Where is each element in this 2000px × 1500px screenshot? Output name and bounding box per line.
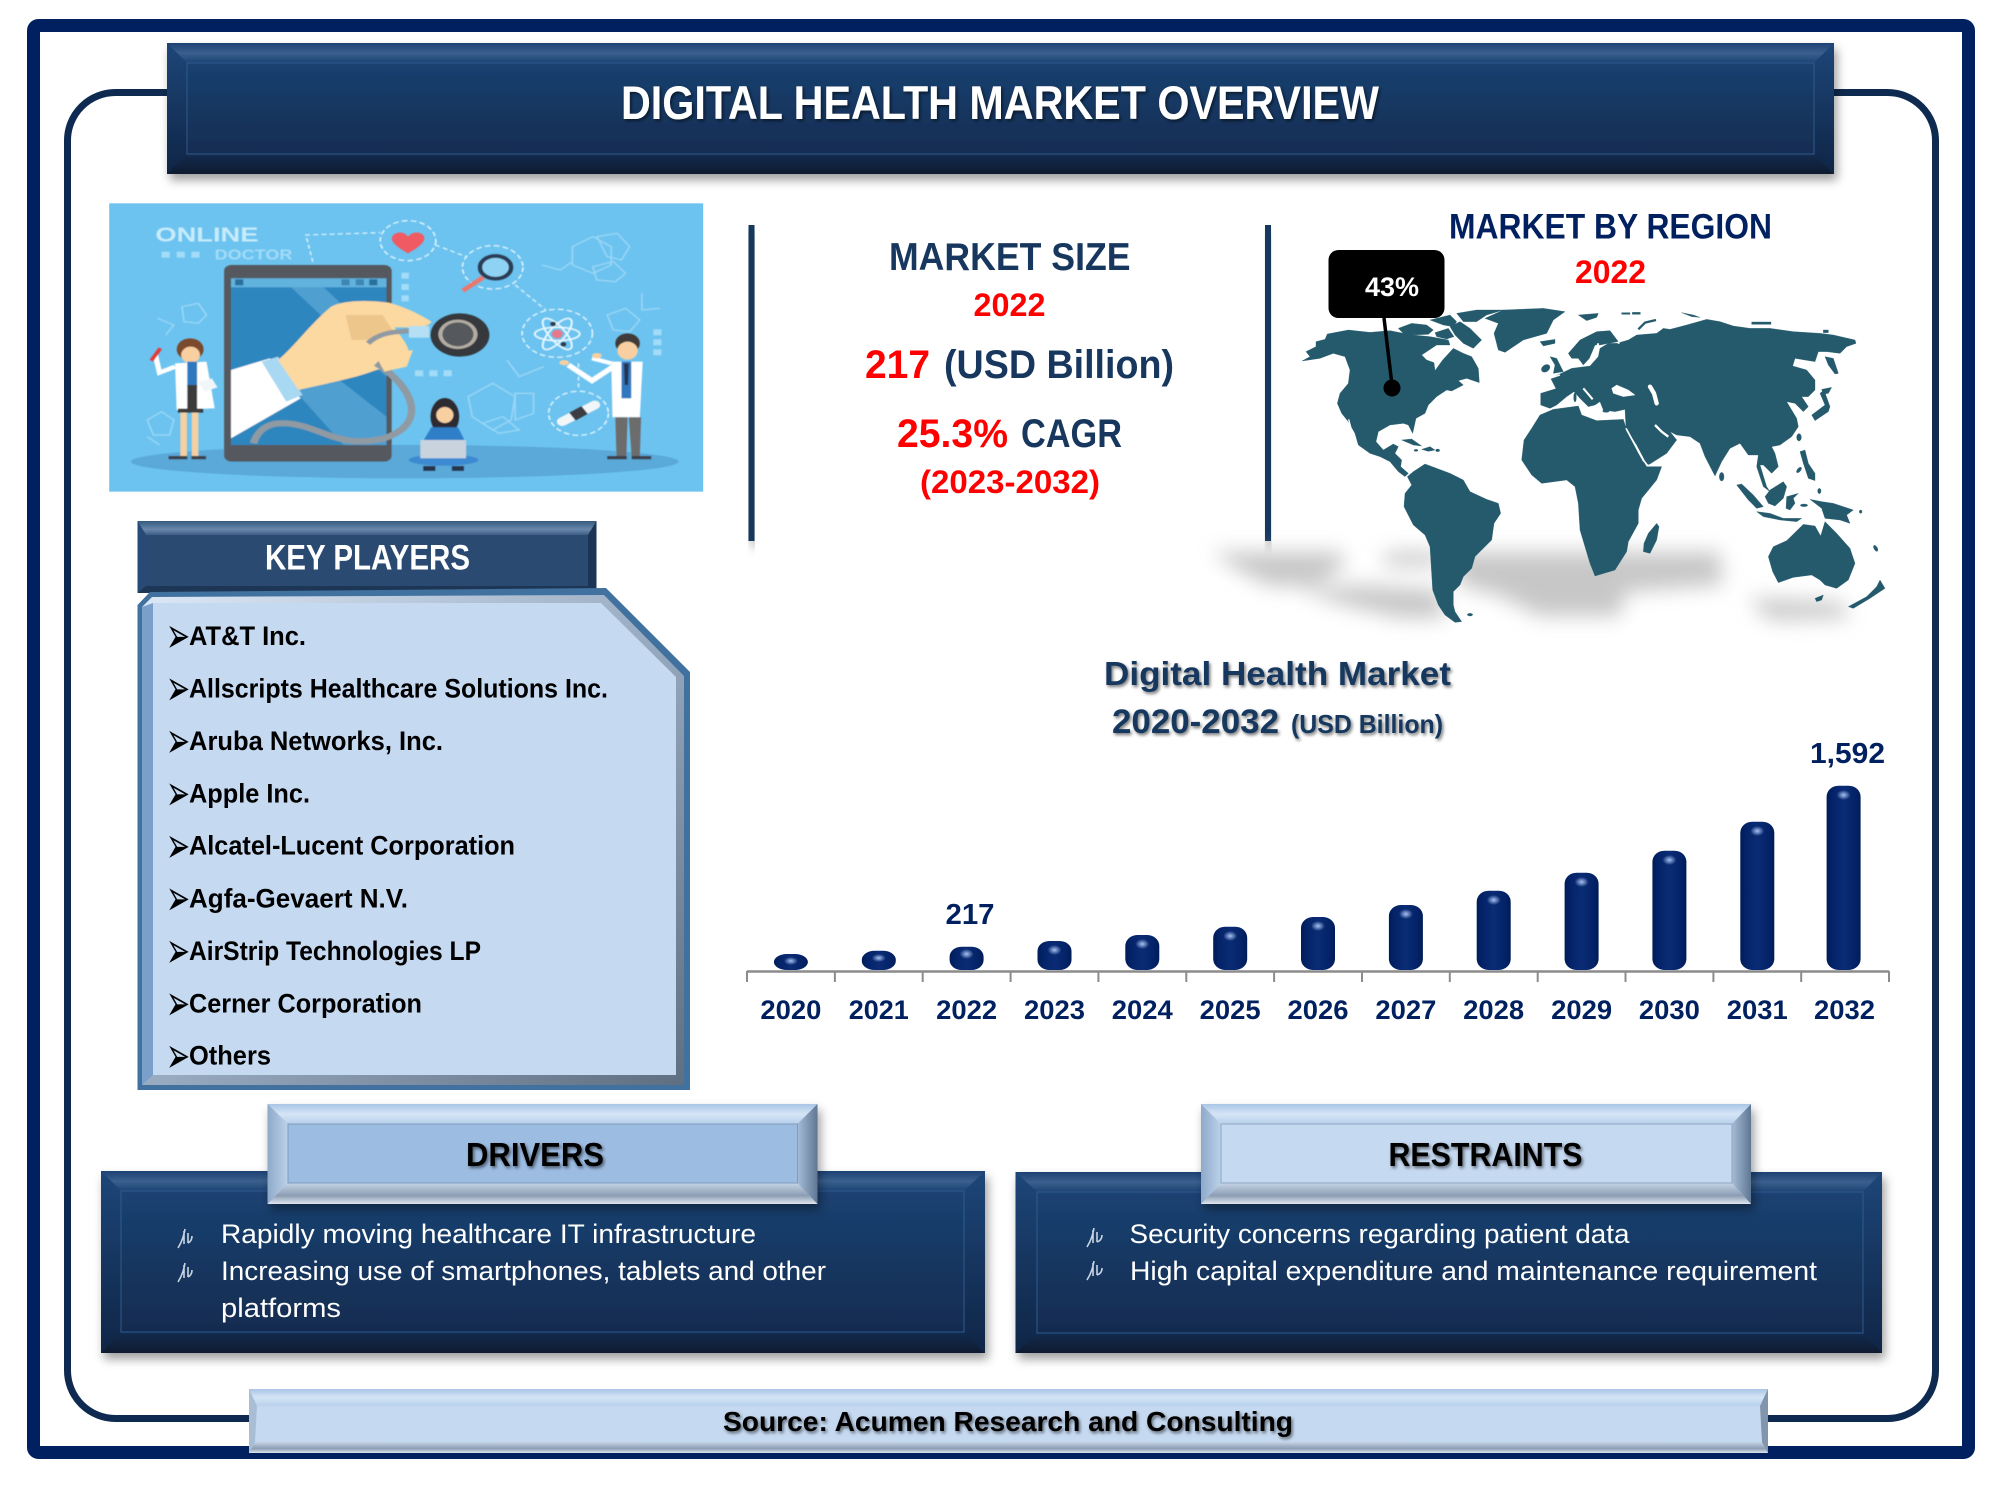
restraints tab — [1201, 1104, 1751, 1204]
key players panel — [138, 588, 690, 1090]
title banner — [167, 43, 1834, 174]
callout value: 43% — [1365, 272, 1419, 302]
player: alcatel-lucent: ➢ — [166, 816, 190, 875]
woman with laptop — [409, 398, 478, 471]
axis — [747, 971, 1889, 982]
player: agfa — [166, 868, 408, 927]
ground shadow — [131, 445, 679, 478]
player: airstrip — [166, 921, 481, 980]
year 2022: 2022 — [974, 287, 1046, 323]
year labels: 2028 — [1463, 995, 1524, 1025]
year labels: 2022 — [936, 995, 997, 1025]
year labels — [760, 995, 1875, 1025]
world map shadow — [1212, 552, 1850, 620]
year labels: 2026 — [1288, 995, 1348, 1025]
value label 1,592: 1,592 — [1810, 738, 1885, 770]
dashed connectors — [306, 233, 579, 390]
divider right — [1265, 225, 1271, 541]
key players header — [138, 521, 596, 593]
player: agfa: ➢ — [166, 868, 190, 927]
player: alcatel-lucent: Alcatel-Lucent Corporation — [189, 830, 515, 860]
cagr label: CAGR — [1021, 412, 1122, 456]
player: aruba — [166, 711, 443, 770]
doctor left — [151, 338, 218, 459]
heading text: MARKET BY REGION — [1449, 208, 1772, 246]
stethoscope tube — [254, 363, 412, 443]
market size block — [865, 236, 1174, 500]
year labels: 2021 — [849, 995, 909, 1025]
year labels: 2029 — [1551, 995, 1612, 1025]
player: alcatel-lucent — [166, 816, 515, 875]
player: cerner — [166, 974, 422, 1032]
value label 217: 217 — [946, 899, 994, 931]
bullet icon — [178, 1229, 192, 1248]
player: airstrip: AirStrip Technologies LP — [189, 936, 481, 966]
driver 1: Rapidly moving healthcare IT infrastructure — [221, 1219, 756, 1249]
source text: Source: Acumen Research and Consulting — [723, 1406, 1293, 1437]
world map — [1302, 308, 1885, 622]
player: agfa: Agfa-Gevaert N.V. — [189, 884, 408, 914]
label: doctor: DOCTOR — [215, 247, 293, 263]
title text: DIGITAL HEALTH MARKET OVERVIEW — [621, 76, 1380, 129]
player: allscripts: ➢ — [166, 658, 190, 717]
drivers tab — [268, 1104, 818, 1204]
source bar — [249, 1389, 1768, 1453]
region year: 2022 — [1575, 254, 1646, 290]
heading: market size: MARKET SIZE — [889, 236, 1130, 279]
player: aruba: Aruba Networks, Inc. — [189, 726, 443, 756]
year labels: 2023 — [1024, 995, 1085, 1025]
hand — [278, 301, 431, 390]
panel: restraints — [1016, 1104, 1882, 1353]
year labels: 2020 — [760, 995, 821, 1025]
drivers heading: DRIVERS — [466, 1136, 604, 1173]
player: at&t — [166, 606, 306, 665]
chest piece — [431, 313, 489, 357]
market by region heading — [1449, 208, 1772, 290]
player: others: ➢ — [166, 1026, 190, 1085]
player: apple: ➢ — [166, 764, 190, 822]
callout: north america 43% — [1328, 250, 1444, 396]
chart title: 2020-2032 — [1112, 703, 1279, 741]
chart title — [1104, 655, 1451, 741]
doctor right — [559, 333, 651, 459]
bar chart — [747, 655, 1889, 1025]
year labels: 2032 — [1814, 995, 1875, 1025]
bandage icon — [549, 391, 608, 435]
sleeve — [231, 358, 301, 438]
year labels: 2025 — [1200, 995, 1261, 1025]
bullet icon — [1087, 1228, 1102, 1247]
player: at&t: ➢ — [166, 606, 190, 665]
bars — [774, 786, 1861, 970]
chart title: Digital Health Market — [1104, 655, 1451, 692]
year labels: 2027 — [1375, 995, 1436, 1025]
value 217: 217 — [865, 343, 930, 387]
bullet icon — [178, 1263, 192, 1282]
driver 2 continued: platforms — [221, 1293, 341, 1323]
player: at&t: AT&T Inc. — [189, 621, 306, 651]
unit usd billion: (USD Billion) — [944, 343, 1174, 387]
restraints heading: RESTRAINTS — [1388, 1136, 1582, 1173]
key players heading: KEY PLAYERS — [265, 538, 470, 578]
magnifier icon — [462, 246, 523, 291]
player: allscripts: Allscripts Healthcare Solutions Inc. — [189, 674, 608, 704]
label: online doctor: ONLINE — [155, 223, 258, 246]
player: cerner: ➢ — [166, 974, 190, 1032]
player: others — [166, 1026, 271, 1085]
illustration: online doctor — [109, 203, 703, 492]
cagr period: (2023-2032) — [920, 464, 1100, 500]
year labels: 2031 — [1727, 995, 1788, 1025]
year labels: 2030 — [1639, 995, 1700, 1025]
player: apple: Apple Inc. — [189, 779, 310, 809]
player: cerner: Cerner Corporation — [189, 989, 422, 1019]
panel: drivers — [101, 1104, 985, 1353]
heart icon — [380, 221, 436, 261]
driver 2: Increasing use of smartphones, tablets and other — [221, 1256, 826, 1286]
restraint 1: Security concerns regarding patient data — [1130, 1219, 1630, 1249]
player: apple — [166, 764, 310, 822]
player: others: Others — [189, 1040, 271, 1070]
atom icon — [522, 309, 592, 357]
player: airstrip: ➢ — [166, 921, 190, 980]
cagr value: 25.3% — [897, 412, 1008, 456]
restraint 2: High capital expenditure and maintenance requirement — [1130, 1256, 1818, 1286]
bar highlights — [784, 790, 1851, 965]
player: allscripts — [166, 658, 608, 717]
americas — [1302, 308, 1565, 622]
year labels: 2024 — [1112, 995, 1173, 1025]
chart title: (USD Billion) — [1291, 709, 1443, 739]
tablet — [224, 265, 392, 462]
divider left — [748, 225, 754, 541]
europe asia africa oceania — [1522, 312, 1885, 608]
player: aruba: ➢ — [166, 711, 190, 770]
bullet icon — [1087, 1261, 1102, 1280]
